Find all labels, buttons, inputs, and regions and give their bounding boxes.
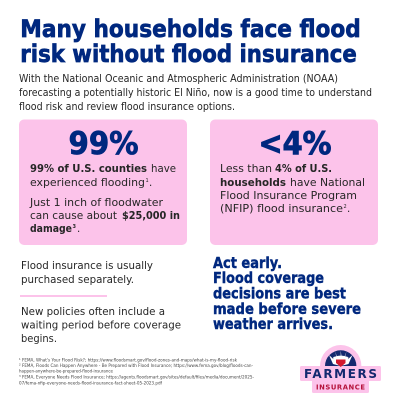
logo: Farmers Insurance: FARMERS (304, 367, 377, 381)
callout: act early (213, 254, 361, 333)
icon: dome with rays and shield (325, 350, 356, 367)
footnotes: ³ FEMA, Everyone Needs Flood Insurance; https://agents.floodsmart.gov/sites/default/files/media/document/2025- (19, 374, 254, 380)
damage cost text: can cause about (30, 211, 117, 222)
text: waiting period (21, 307, 181, 345)
text: purchased separately: Flood insurance is usually (21, 261, 153, 272)
title: Many households face flood (20, 15, 361, 43)
NFIP text: Less than (220, 164, 272, 175)
damage cost text: $25,000 in (122, 211, 180, 222)
callout: act early: Act early. (213, 254, 282, 272)
damage cost text: . (77, 224, 80, 235)
NFIP text: have National (290, 178, 365, 189)
title: risk without flood insurance (20, 40, 357, 68)
NFIP text: (NFIP) flood insurance (220, 204, 343, 215)
footnotes: ¹ FEMA, What's Your Flood Risk?; https://www.floodsmart.gov/flood-zones-and-maps/what-is-my-flood-risk (19, 358, 237, 364)
big stat: 99%: 99% (68, 126, 138, 162)
text: waiting period: New policies often include a (21, 307, 165, 318)
title (20, 15, 361, 68)
county flooding text (30, 164, 176, 189)
text: waiting period: begins. (21, 334, 57, 345)
intro text (19, 74, 372, 113)
NFIP text: 2 (344, 204, 347, 210)
county flooding text: 1 (146, 178, 149, 184)
NFIP text: households (220, 178, 286, 189)
text: purchased separately: purchased separately. (21, 275, 134, 286)
NFIP text (220, 164, 365, 215)
footnotes (19, 358, 254, 386)
callout: act early: weather arrives. (213, 315, 333, 333)
big stat: <4%: <4% (258, 126, 332, 162)
NFIP text: 4% of U.S. (275, 164, 332, 175)
text: purchased separately (21, 261, 153, 286)
county flooding text: . (149, 178, 152, 189)
panel: 99% of counties (19, 120, 187, 245)
intro text: forecasting a potentially historic El Niño, now is a good time to understand (19, 88, 372, 99)
damage cost text: 3 (72, 224, 76, 230)
footnotes: happen-anywhere-be-prepared-flood-insurance (19, 369, 113, 375)
county flooding text: experienced flooding (30, 178, 145, 189)
panel: under 4% with flood insurance (210, 120, 378, 245)
callout: act early: made before severe (213, 300, 361, 318)
footnotes: ² FEMA, Floods Can Happen Anywhere - Be Prepared with Flood Insurance; https://www.fema.gov/blog/floods-can- (19, 363, 253, 369)
intro text: flood risk and review flood insurance options. (19, 102, 235, 113)
text: waiting period: waiting period before coverage (21, 320, 181, 332)
logo: Farmers Insurance (300, 345, 381, 393)
NFIP text: . (347, 204, 350, 215)
county flooding text: 99% of U.S. counties (30, 164, 147, 175)
footnotes: 07/fema-nfip-everyone-needs-flood-insurance-fact-sheet-05-2023.pdf (19, 380, 162, 386)
county flooding text: have (151, 164, 176, 175)
damage cost text: damage (30, 224, 72, 235)
logo: Farmers Insurance: INSURANCE (316, 383, 365, 391)
intro text: With the National Oceanic and Atmospheric Administration (NOAA) (19, 74, 338, 85)
callout: act early: Flood coverage (213, 269, 324, 287)
damage cost text: Just 1 inch of floodwater (29, 198, 164, 209)
damage cost text (29, 198, 180, 235)
NFIP text: Flood Insurance Program (220, 191, 357, 202)
callout: act early: decisions are best (213, 284, 346, 302)
